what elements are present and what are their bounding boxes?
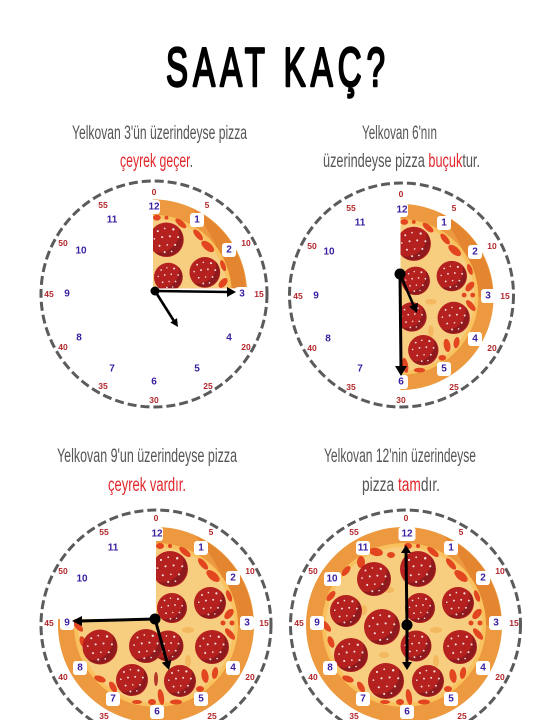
- dashed clock face: [41, 181, 267, 407]
- minute numbers: 25: [449, 382, 459, 392]
- minute numbers: 10: [245, 566, 255, 576]
- hour numbers: 1: [441, 218, 447, 228]
- hour numbers: 6: [404, 706, 410, 718]
- hour numbers: 3: [239, 288, 245, 300]
- minute numbers: 15: [259, 618, 269, 628]
- minute numbers: 5: [459, 527, 464, 537]
- clock hands: [401, 545, 412, 670]
- hour numbers: 5: [441, 364, 447, 374]
- minute numbers: 15: [254, 289, 264, 299]
- minute numbers: 10: [241, 238, 251, 248]
- dashed clock face: [290, 183, 514, 407]
- minute numbers: 50: [58, 566, 68, 576]
- minute numbers: 40: [307, 343, 317, 353]
- hour numbers: 11: [358, 542, 369, 554]
- minute numbers: 45: [294, 618, 304, 628]
- hour numbers: 1: [194, 214, 200, 226]
- hour numbers: 5: [194, 364, 200, 374]
- hour numbers: 11: [108, 542, 119, 554]
- clock: quarter past: [41, 181, 267, 407]
- minute numbers: 55: [98, 200, 108, 210]
- minute numbers: 40: [308, 672, 318, 682]
- hour numbers: 6: [154, 706, 160, 718]
- caption: half past: üzerindeyse pizza buçuktur.: [323, 151, 480, 172]
- minute numbers: 55: [346, 203, 356, 213]
- minute numbers: 45: [44, 289, 54, 299]
- minute numbers: 20: [487, 343, 497, 353]
- hour numbers: 3: [244, 618, 250, 628]
- minute numbers: 50: [307, 241, 317, 251]
- hour numbers: [64, 528, 250, 718]
- minute numbers: 50: [308, 566, 318, 576]
- minute numbers: 45: [44, 618, 54, 628]
- minute numbers: 15: [509, 618, 519, 628]
- hour numbers: 1: [448, 542, 454, 554]
- minute numbers: 15: [500, 291, 510, 301]
- hour numbers: 8: [325, 334, 331, 344]
- hour numbers: 4: [226, 332, 232, 344]
- minute numbers: 55: [99, 527, 109, 537]
- caption: o'clock: pizza tamdır.: [362, 475, 440, 496]
- minute numbers: 10: [487, 241, 497, 251]
- hour numbers: 4: [472, 334, 478, 344]
- minute numbers: 5: [209, 527, 214, 537]
- caption: quarter past: çeyrek geçer.: [120, 151, 193, 172]
- hour numbers: [313, 204, 491, 388]
- minute numbers: [44, 513, 269, 720]
- title: SAAT KAÇ?: [166, 36, 385, 98]
- hour numbers: 4: [230, 662, 236, 674]
- caption: quarter to: [57, 446, 237, 496]
- hour numbers: 6: [151, 376, 157, 388]
- hour numbers: 12: [396, 204, 408, 216]
- hour numbers: 12: [151, 528, 163, 540]
- caption: half past: Yelkovan 6'nın: [362, 123, 437, 144]
- hour numbers: 9: [314, 618, 320, 628]
- hour numbers: 10: [326, 574, 338, 584]
- hour number tiles: [310, 527, 503, 719]
- hour numbers: 2: [472, 246, 478, 258]
- pizza: three quarters: [58, 527, 254, 720]
- clock hands: [150, 286, 236, 327]
- minute numbers: 10: [495, 566, 505, 576]
- hour numbers: 9: [64, 618, 70, 628]
- pizza: quarter slice: [153, 199, 247, 288]
- hour numbers: 8: [77, 662, 83, 674]
- minute numbers: 20: [245, 672, 255, 682]
- minute numbers: 35: [98, 381, 108, 391]
- minute numbers: 35: [346, 382, 356, 392]
- hour numbers: 10: [323, 246, 335, 258]
- clock: half past: [290, 183, 514, 407]
- caption: quarter past: Yelkovan 3'ün üzerindeyse pizza: [72, 123, 247, 144]
- dashed clock face: [41, 510, 271, 720]
- hour numbers: 4: [480, 662, 486, 674]
- hour numbers: 7: [109, 364, 115, 374]
- hour numbers: 7: [360, 694, 366, 704]
- minute numbers: 20: [495, 672, 505, 682]
- caption: o'clock: [324, 446, 476, 496]
- hour numbers: 2: [226, 244, 232, 256]
- minute numbers: 25: [203, 381, 213, 391]
- hour number tiles: [60, 527, 254, 719]
- hour numbers: 8: [327, 662, 333, 674]
- clock: quarter to: [41, 510, 271, 720]
- hour numbers: 5: [198, 694, 204, 704]
- hour numbers: 10: [75, 246, 87, 256]
- dashed clock face: [290, 510, 520, 720]
- hour numbers: 10: [76, 574, 88, 584]
- hour numbers: 12: [148, 202, 160, 212]
- minute numbers: 20: [241, 342, 251, 352]
- clock hands: [394, 268, 418, 376]
- caption: quarter to: Yelkovan 9'un üzerindeyse pizza: [57, 446, 237, 467]
- hour numbers: 12: [401, 528, 413, 540]
- minute numbers: 55: [349, 527, 359, 537]
- caption: quarter to: çeyrek vardır.: [108, 475, 186, 496]
- caption: quarter past: [72, 123, 247, 172]
- hour numbers: 7: [110, 694, 116, 704]
- minute numbers: 0: [404, 513, 409, 523]
- pizza: half: [400, 204, 494, 390]
- hour numbers: [314, 528, 499, 718]
- hour numbers: 3: [493, 618, 499, 628]
- minute numbers: [293, 189, 510, 405]
- hour numbers: 5: [448, 694, 454, 704]
- hour numbers: 2: [480, 572, 486, 584]
- hour numbers: 11: [355, 218, 366, 228]
- caption: half past: [323, 123, 480, 172]
- clock: o'clock: [290, 510, 520, 720]
- hour numbers: 2: [230, 572, 236, 584]
- hour numbers: 7: [357, 364, 363, 374]
- hour number tiles: [394, 203, 495, 389]
- minute numbers: 30: [149, 395, 159, 405]
- minute numbers: 30: [396, 395, 406, 405]
- minute numbers: 40: [58, 342, 68, 352]
- hour numbers: 9: [64, 288, 70, 300]
- minute numbers: [44, 187, 264, 405]
- clock hands: [72, 614, 171, 670]
- hour numbers: 6: [398, 376, 404, 388]
- pizza: whole: [306, 527, 502, 720]
- minute numbers: 0: [154, 513, 159, 523]
- hour numbers: 11: [107, 214, 118, 226]
- minute numbers: 5: [205, 200, 210, 210]
- minute numbers: 45: [293, 291, 303, 301]
- minute numbers: 40: [58, 672, 68, 682]
- hour numbers: 8: [76, 332, 82, 344]
- hour numbers: 9: [313, 290, 319, 302]
- hour numbers: [64, 202, 245, 388]
- minute numbers: 0: [152, 187, 157, 197]
- hour numbers: 1: [198, 542, 204, 554]
- minute numbers: 50: [58, 238, 68, 248]
- minute numbers: 0: [399, 189, 404, 199]
- hour numbers: 3: [485, 290, 491, 302]
- hour number tiles: [146, 200, 249, 301]
- minute numbers: 5: [452, 203, 457, 213]
- minute numbers: [294, 513, 519, 720]
